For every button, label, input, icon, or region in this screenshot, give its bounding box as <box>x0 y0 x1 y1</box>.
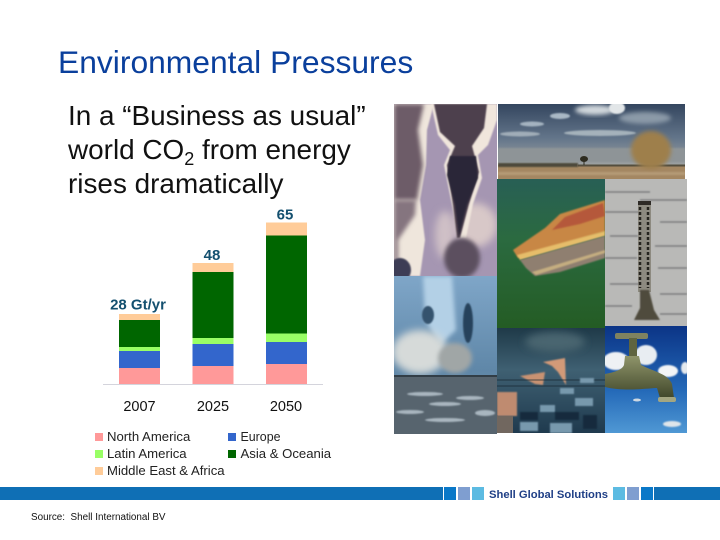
photo collage <box>389 102 689 434</box>
subheading: business as usual: rises dramatically <box>68 168 283 199</box>
subheading: business as usual: world CO <box>68 134 184 165</box>
year labels: 2007 <box>123 399 156 415</box>
chart legend: Middle East & Africa <box>107 463 225 478</box>
axis line <box>103 384 323 385</box>
subheading: business as usual <box>67 100 366 199</box>
photo: traffic jam with smog <box>497 328 605 433</box>
year labels: 2050 <box>270 399 302 415</box>
year labels: 2025 <box>197 399 229 415</box>
photo: deforested area <box>497 179 605 328</box>
photo: desert landscape <box>498 102 685 179</box>
photo: water tap against sky <box>603 326 689 433</box>
title: Environmental Pressures <box>58 44 413 80</box>
bar 2050 <box>266 222 307 384</box>
value labels: 48 <box>204 247 220 264</box>
chart legend: Asia & Oceania <box>240 446 332 461</box>
value labels <box>110 206 293 314</box>
value labels: 65 <box>277 206 293 224</box>
bar 2007 <box>119 314 160 384</box>
footer band with Shell Global Solutions logo <box>0 487 720 501</box>
subheading: business as usual: from energy <box>194 134 351 165</box>
photo: collapsing glacier <box>392 276 497 434</box>
photo: smokestack plumes <box>389 104 497 282</box>
chart legend <box>95 429 332 478</box>
logo text: Shell Global Solutions <box>489 489 608 501</box>
value labels: 28 Gt/yr <box>110 296 166 314</box>
subheading: business as usual: 2 <box>184 149 194 169</box>
source note: Source: Shell International BV <box>31 512 166 523</box>
photo: flood gauge in water <box>605 179 687 326</box>
chart legend: North America <box>107 429 191 444</box>
subheading: business as usual: In a “Business as usual” <box>68 100 366 131</box>
bar 2025 <box>192 263 234 384</box>
stacked bar chart: CO2 emissions by region <box>103 206 323 415</box>
chart legend: Latin America <box>107 446 187 461</box>
chart legend: Europe <box>240 429 280 444</box>
year labels <box>123 399 302 415</box>
